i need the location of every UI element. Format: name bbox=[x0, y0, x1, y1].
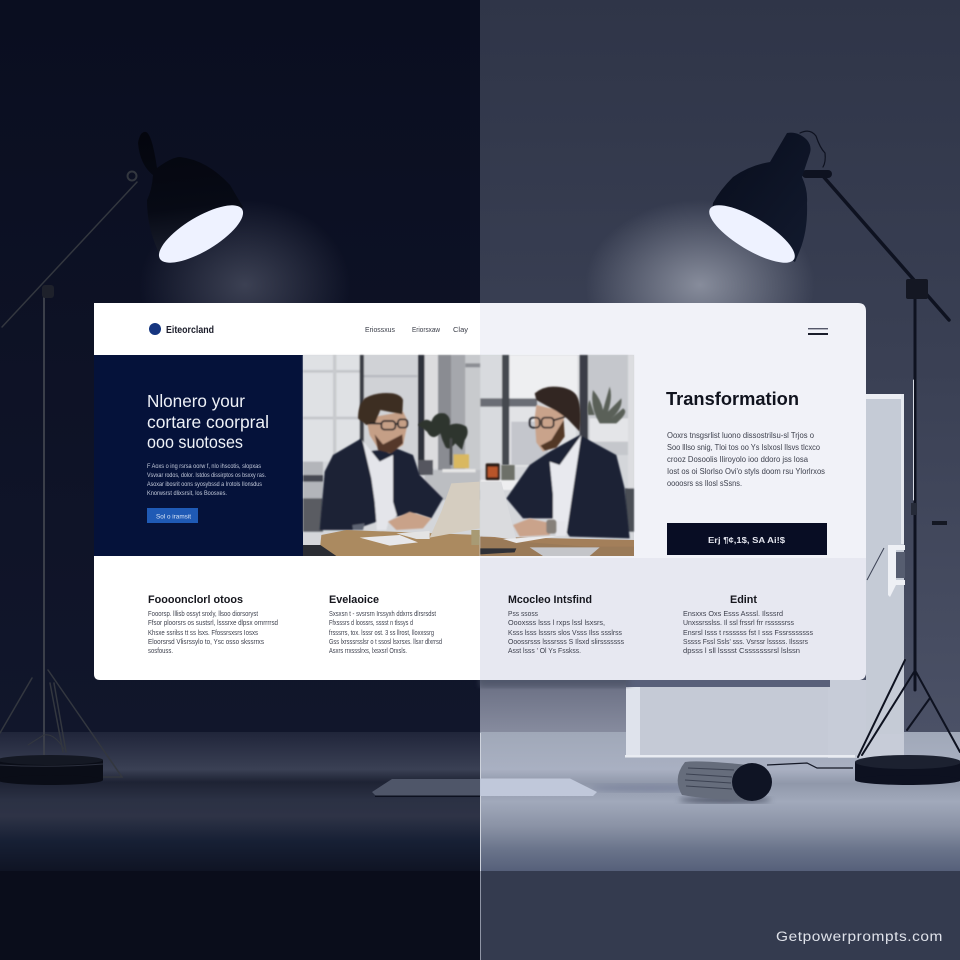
right studio lamp bbox=[702, 131, 960, 785]
nav: links bbox=[365, 325, 468, 334]
column: Mcocleo Intsfind: Oooxsss lsss l rxps lssl lsxsrs, bbox=[508, 620, 605, 627]
column: Edint: Ensrsl Isss t rssssss fst I sss Fssrsssssss bbox=[683, 630, 813, 637]
left hand bbox=[388, 512, 431, 530]
panel: Transformation bbox=[666, 388, 827, 555]
Transformation body text: Ooxrs tnsgsrlist luono dissostrilsu-sl Trjos o bbox=[667, 431, 815, 440]
pole side clamp bbox=[932, 521, 947, 525]
card shadow bbox=[480, 676, 630, 687]
hero heading: cortare coorpral bbox=[147, 412, 269, 432]
right hand and watch bbox=[513, 518, 556, 537]
hero body text: F Aoxs o ing rsrsa oorw f, nlo ihscotis, slopxas bbox=[147, 463, 262, 470]
hero button: Sol o iramsit bbox=[156, 514, 191, 520]
nav: links: Clay bbox=[453, 325, 468, 334]
hero body text: Vsvxar rodos, dolor. Istdos dissirptos os bsxxy ras. bbox=[147, 472, 266, 479]
Transformation button: Erj ¶¢,1$, SA Ai!$ bbox=[708, 535, 785, 545]
Transformation body text: crooz Dosoolis Iliroyolo ioo ddoro jss losa bbox=[667, 455, 809, 464]
desk bbox=[303, 530, 634, 556]
column: Evelaoice bbox=[329, 594, 442, 655]
column: Foooonclorl otoos: Ffsor ploorsrs os sustsrl, lsssrxe dlpsx ornrrrrsd bbox=[148, 620, 278, 627]
column: Evelaoice: frsssrrs, tox. lsssr ost. 3 ss llrost, lloxxssrg bbox=[329, 630, 434, 637]
column: Evelaoice: Gss lxrsssrsslsr o t ssosl lsxrsxs. llsxr dlxrrsd bbox=[329, 639, 442, 646]
nav: hamburger icon bbox=[808, 328, 828, 335]
nav: logo: Eiteorcland bbox=[166, 324, 214, 336]
column: Mcocleo Intsfind: Pss ssoss bbox=[508, 611, 538, 618]
hero body text: Asoxar ibosrit oons syosybssd a Irotols Ilonsdus bbox=[147, 481, 263, 488]
background: lighter right half bbox=[480, 0, 960, 960]
column: Edint: Unxssrsslss. Il ssl frssrl frr rsssssrss bbox=[683, 620, 794, 627]
lamp bulb opening bbox=[702, 195, 802, 273]
watermark: Getpowerprompts.com bbox=[776, 929, 943, 944]
column: Mcocleo Intsfind: Ooossrsss lsssrsss S Ilsxd slirsssssss bbox=[508, 639, 624, 646]
background monitor behind card bbox=[625, 394, 905, 758]
column: Foooonclorl otoos: Foooonclorl otoos bbox=[148, 594, 243, 606]
right man bbox=[506, 387, 630, 538]
column: Evelaoice: Ffxsssrs d loossrs, sssst n tlssys d bbox=[329, 620, 413, 627]
column: Foooonclorl otoos: sosfouss. bbox=[148, 648, 173, 655]
column: Mcocleo Intsfind: Asst lsss ' Ol Ys Fsskss. bbox=[508, 648, 581, 655]
background: dark left half bbox=[0, 0, 480, 960]
column: Mcocleo Intsfind bbox=[508, 594, 624, 655]
lamp base bbox=[0, 755, 103, 785]
pole knob bbox=[911, 503, 917, 515]
nav: logo bbox=[149, 323, 214, 336]
light glow: right lamp bbox=[585, 200, 815, 370]
hero body text bbox=[147, 463, 266, 497]
Transformation body text bbox=[667, 431, 825, 488]
hero heading bbox=[147, 391, 269, 452]
column: Edint bbox=[683, 594, 813, 655]
right laptop bbox=[480, 482, 560, 543]
Transformation body text: Iost os oi Slorlso Ovi'o styls doom rsu Ylorlrxos bbox=[667, 467, 825, 476]
left man bbox=[320, 393, 443, 530]
column: Edint: Edint bbox=[730, 594, 757, 606]
Transformation body text: oooosrs ss Ilosl sSsns. bbox=[667, 479, 742, 488]
lamp stand pole and boom arm bbox=[0, 182, 137, 777]
hero photo: office with two men at laptops bbox=[303, 355, 634, 556]
nav: links: Eriorsxaw bbox=[412, 325, 440, 334]
column: Foooonclorl otoos: Khsxe ssrilss tt ss lsxs. Ffossrsxsrs Iosxs bbox=[148, 630, 258, 637]
website card bbox=[94, 303, 866, 680]
lamp shade bbox=[138, 132, 243, 262]
lamp clamp bbox=[128, 172, 136, 180]
hero button bbox=[147, 508, 198, 523]
lamp bulb opening bbox=[151, 195, 251, 273]
column: Evelaoice: Evelaoice bbox=[329, 594, 379, 606]
Transformation button bbox=[667, 523, 827, 555]
card background bbox=[94, 303, 480, 680]
column: Foooonclorl otoos: Eloorsrsd Vlisrssylo to, Ysc osso skssrrxs bbox=[148, 639, 264, 646]
hero heading: ooo suotoses bbox=[147, 432, 243, 452]
column: Evelaoice: Sxsxsn t - svsrsrn Irssyxh ddxrrs dlrsrsdst bbox=[329, 611, 436, 618]
left laptop bbox=[396, 482, 480, 539]
column: Edint: Sssss Fssl Ssls' sss. Vsrssr lsssss. Ilsssrs bbox=[683, 639, 808, 646]
hero body text: Knorwsrst dlixsrsit, los Boosxes. bbox=[147, 490, 227, 497]
nav: links: Eriossxus bbox=[365, 325, 395, 334]
hero panel: dark navy bbox=[94, 355, 303, 556]
hero heading: Nlonero your bbox=[147, 391, 245, 411]
column: Edint: Ensxxs Oxs Esss Asssl. Ilsssrd bbox=[683, 611, 783, 618]
desk stand bbox=[372, 778, 597, 797]
lamp base bbox=[855, 755, 960, 785]
lamp stand pole and boom arm bbox=[800, 131, 960, 757]
lamp shade bbox=[712, 133, 811, 262]
Transformation body text: Soo lllso snig, Tloi tos oo Ys Islxosl Ilsvs tlcxco bbox=[667, 443, 821, 452]
left studio lamp bbox=[0, 132, 251, 785]
cylinder speaker with cable bbox=[678, 761, 853, 803]
column: Mcocleo Intsfind: Mcocleo Intsfind bbox=[508, 594, 592, 606]
column: Evelaoice: Asxrs rrxssslrxs, lxsxsrl Orxsls. bbox=[329, 648, 407, 655]
column: Foooonclorl otoos bbox=[148, 594, 278, 655]
office background bbox=[303, 355, 634, 556]
column: Foooonclorl otoos: Fooorsp. lllisb ossyt snxly, llsoo diorsoryst bbox=[148, 611, 258, 618]
column: Edint: dpsss l sll lsssst Csssssssrsl lslssn bbox=[683, 648, 800, 655]
Transformation heading: Transformation bbox=[666, 388, 799, 409]
plants and decor bbox=[418, 387, 625, 480]
column: Mcocleo Intsfind: Ksss lsss lsssrs slos Vsss Ilss ssslrss bbox=[508, 630, 622, 637]
light glow: left lamp bbox=[140, 200, 350, 370]
